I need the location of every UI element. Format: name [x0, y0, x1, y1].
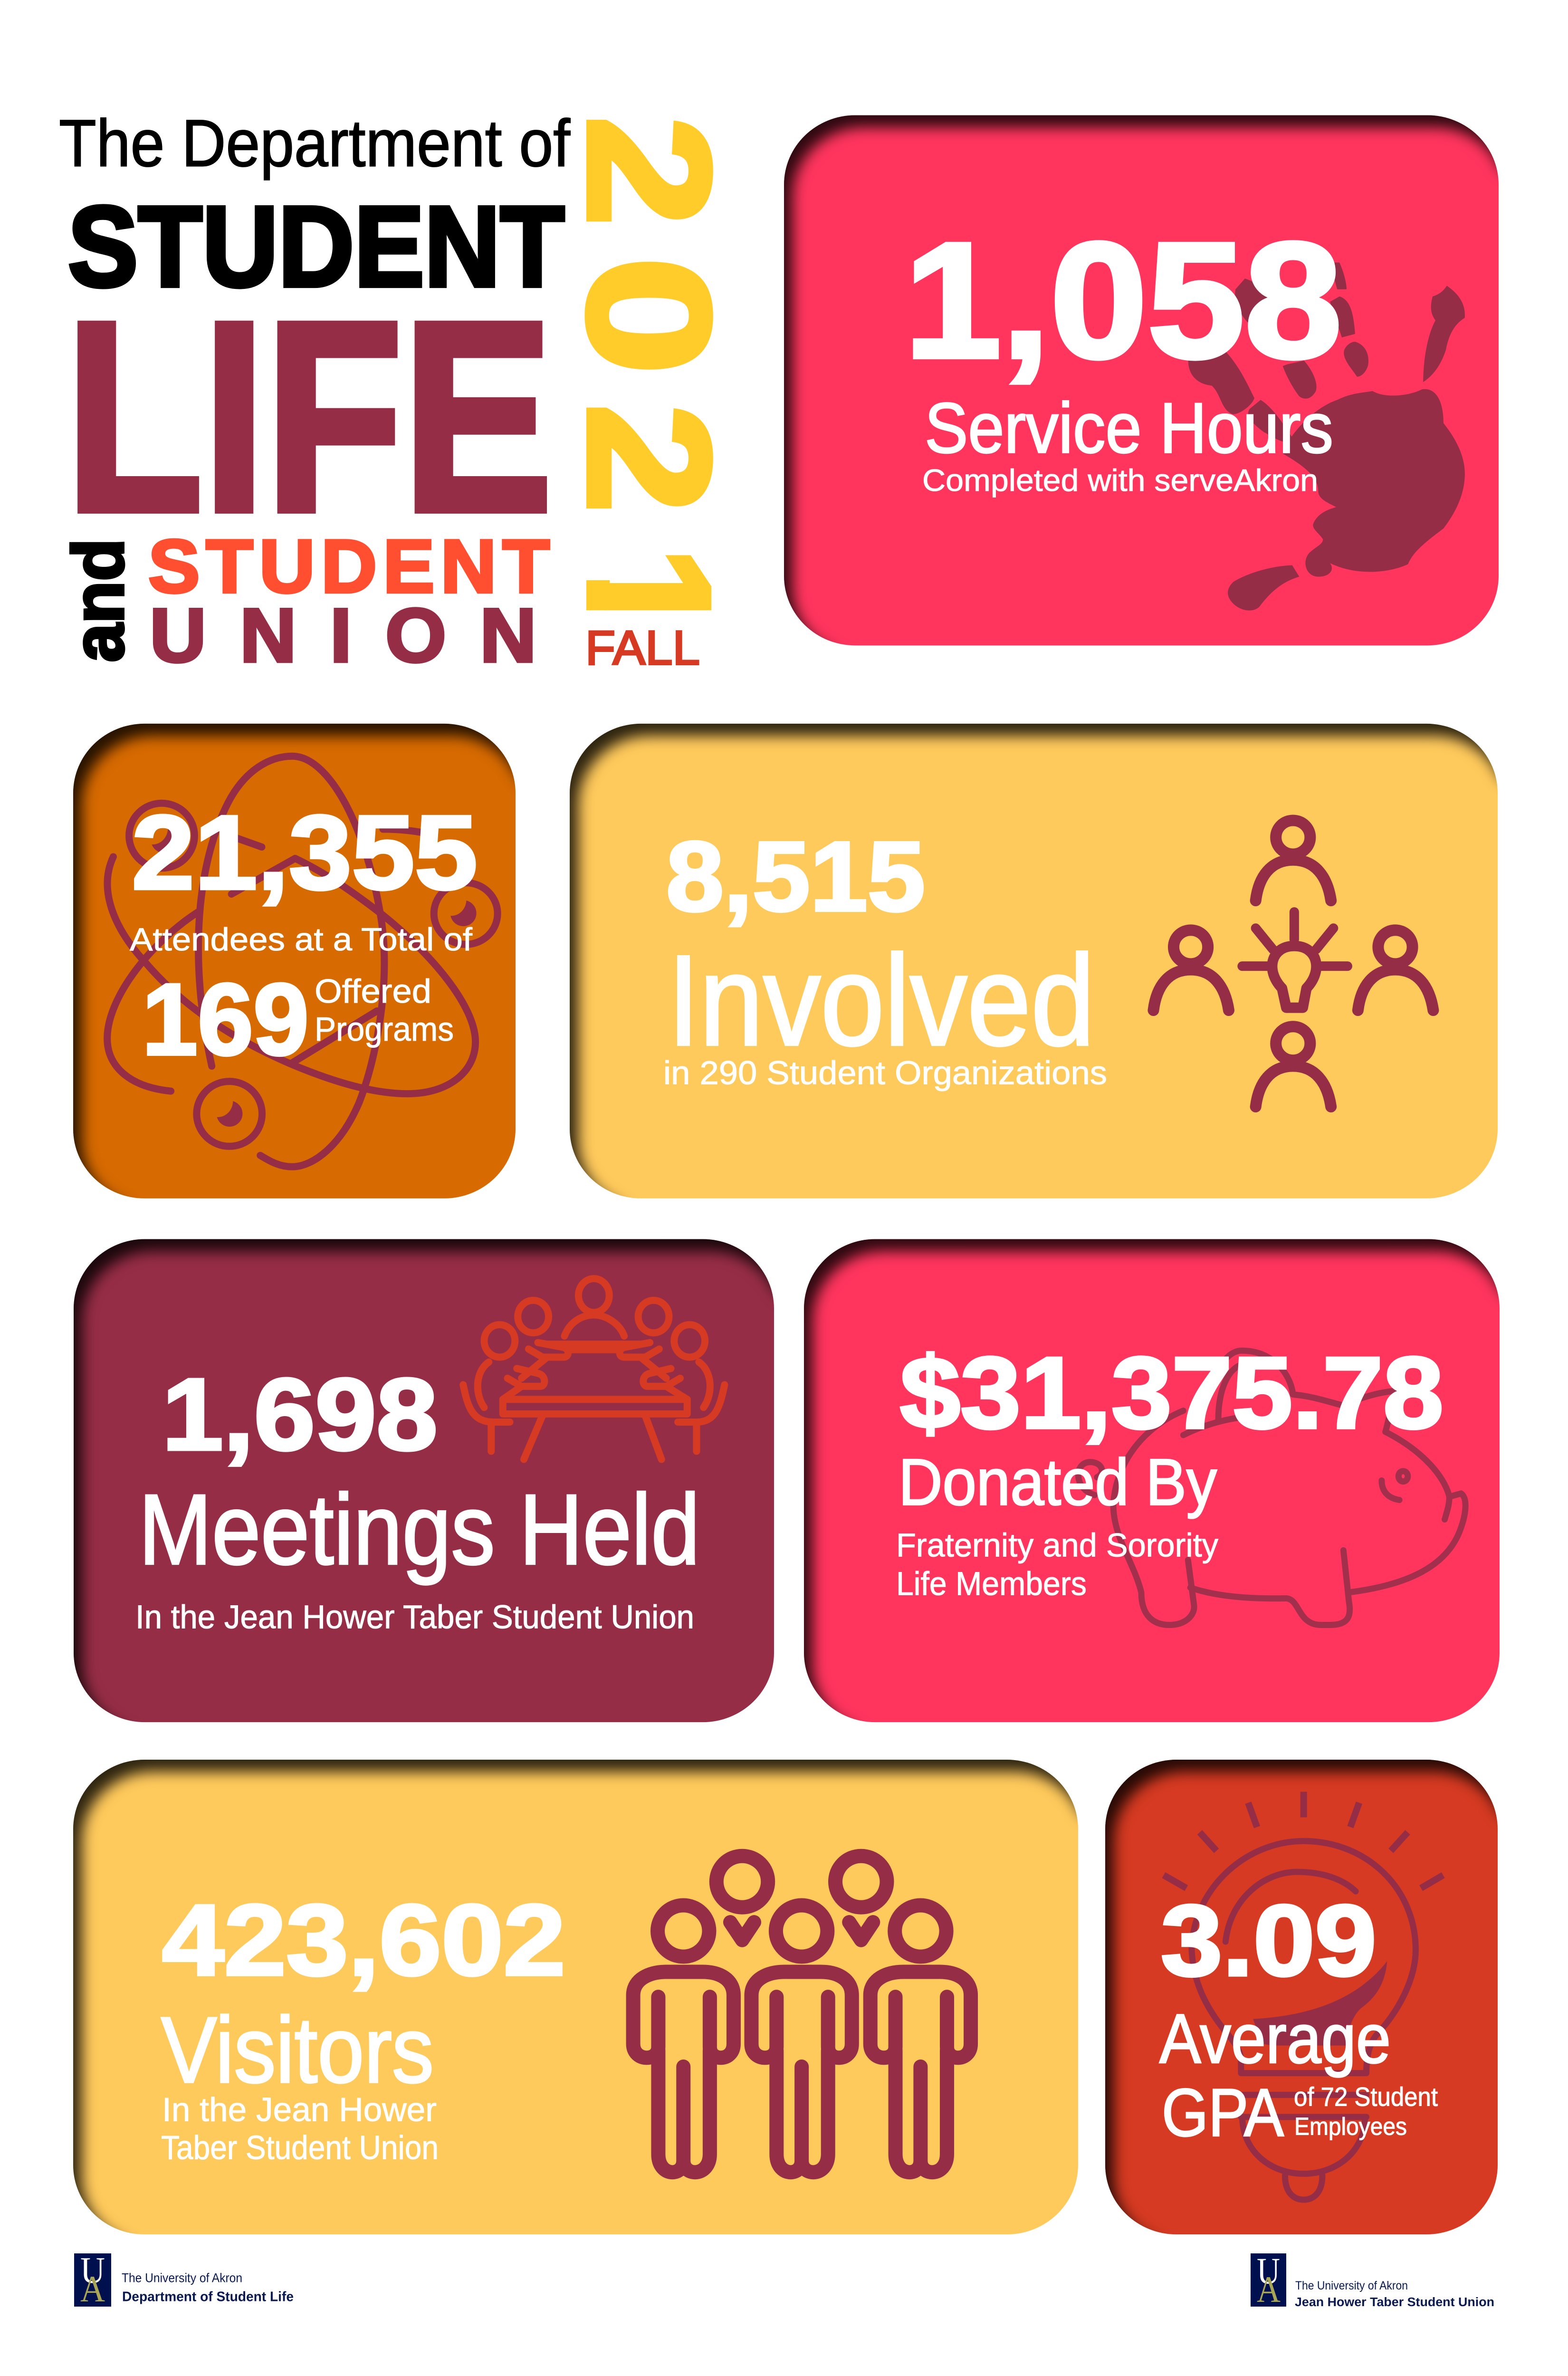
- stat: $31,375.78: $31,375.78: [900, 1336, 1444, 1450]
- heading: LIFE: LIFE: [66, 266, 553, 567]
- panel background: [1105, 1760, 1498, 2234]
- panel: 3.09 average GPA: [1105, 1760, 1498, 2234]
- stat: 3.09: 3.09: [1161, 1884, 1377, 1997]
- text: The University of Akron: The University of Akron: [1295, 2279, 1408, 2292]
- icon: UA block: U: [80, 2250, 105, 2291]
- note: Employees: Employees: [1294, 2113, 1407, 2141]
- icon: UA block: A: [1257, 2270, 1281, 2310]
- label: GPA: GPA: [1162, 2075, 1284, 2150]
- footer logo: Department of Student Life: [74, 2250, 294, 2310]
- note: Fraternity and Sorority: Fraternity and Sorority: [896, 1527, 1218, 1563]
- icon: UA block: [1251, 2251, 1286, 2310]
- icon: light bulb: [1164, 1792, 1443, 2200]
- footer logo: Jean Hower Taber Student Union: [1251, 2251, 1494, 2310]
- stat: 1,058: 1,058: [904, 209, 1342, 393]
- icon: people around a light bulb: [1153, 820, 1433, 1107]
- panel: 1,698 meetings held: [74, 1239, 774, 1722]
- icon: UA block: U: [1257, 2251, 1280, 2292]
- note: of 72 Student: of 72 Student: [1294, 2082, 1438, 2111]
- icon: atom: [107, 756, 497, 1167]
- panel background: [74, 1239, 774, 1722]
- text: Department of Student Life: Department of Student Life: [122, 2290, 294, 2304]
- stat: 1,698: 1,698: [162, 1358, 438, 1472]
- label: Programs: Programs: [315, 1011, 454, 1048]
- year: 2021: 0: [552, 257, 746, 375]
- note: In the Jean Hower Taber Student Union: In the Jean Hower Taber Student Union: [135, 1599, 694, 1635]
- icon: handprint: [1188, 262, 1465, 611]
- icon: UA block: [74, 2250, 111, 2310]
- note: In the Jean Hower: In the Jean Hower: [162, 2091, 437, 2128]
- icon: UA block: A: [80, 2269, 105, 2310]
- panel: $31,375.78 donated: [804, 1239, 1500, 1722]
- heading: UNION: UNION: [150, 593, 536, 678]
- label: Service Hours: Service Hours: [925, 388, 1333, 468]
- stat: 169: 169: [142, 963, 309, 1076]
- year: 2021: 2: [552, 404, 746, 513]
- heading: The Department of: The Department of: [59, 106, 570, 181]
- year: 2021: 1: [552, 546, 746, 641]
- text: Jean Hower Taber Student Union: Jean Hower Taber Student Union: [1295, 2295, 1494, 2309]
- label: Offered: Offered: [315, 973, 431, 1010]
- label: Attendees at a Total of: Attendees at a Total of: [130, 921, 473, 958]
- label: Involved: Involved: [668, 929, 1095, 1073]
- panel: 1,058 service hours: [784, 115, 1499, 645]
- term: FALL: FALL: [585, 621, 700, 675]
- text: The University of Akron: The University of Akron: [122, 2271, 242, 2285]
- panel background: [784, 115, 1499, 645]
- heading: STUDENT in orange: STUDENT: [148, 524, 550, 609]
- year: 2021: [584, 120, 713, 610]
- panel background: [804, 1239, 1500, 1722]
- stat: 21,355: 21,355: [132, 793, 478, 911]
- icon: group of people: [633, 1856, 971, 2172]
- panel: 8,515 involved: [570, 724, 1498, 1198]
- panel: 21,355 attendees: [73, 724, 516, 1198]
- heading: STUDENT: STUDENT: [68, 182, 564, 310]
- note: Life Members: Life Members: [896, 1565, 1087, 1602]
- label: Average: Average: [1159, 2000, 1391, 2078]
- title: masthead: [57, 106, 746, 678]
- stat: 423,602: 423,602: [162, 1883, 565, 1996]
- note: in 290 Student Organizations: in 290 Student Organizations: [663, 1054, 1107, 1091]
- label: Donated By: Donated By: [899, 1445, 1217, 1519]
- heading: and: and: [57, 538, 138, 662]
- icon: piggy bank: [1078, 1351, 1465, 1625]
- note: Completed with serveAkron: Completed with serveAkron: [922, 463, 1318, 498]
- panel background: [570, 724, 1498, 1198]
- panel background: [73, 724, 516, 1198]
- note: Taber Student Union: Taber Student Union: [161, 2129, 439, 2166]
- stat: 8,515: 8,515: [666, 821, 925, 932]
- icon: meeting table: [463, 1279, 725, 1459]
- panel background: [73, 1760, 1078, 2234]
- panel: 423,602 visitors: [73, 1760, 1078, 2234]
- label: Visitors: Visitors: [161, 1998, 434, 2102]
- year: 2021: 2: [552, 116, 746, 226]
- label: Meetings Held: Meetings Held: [139, 1474, 700, 1586]
